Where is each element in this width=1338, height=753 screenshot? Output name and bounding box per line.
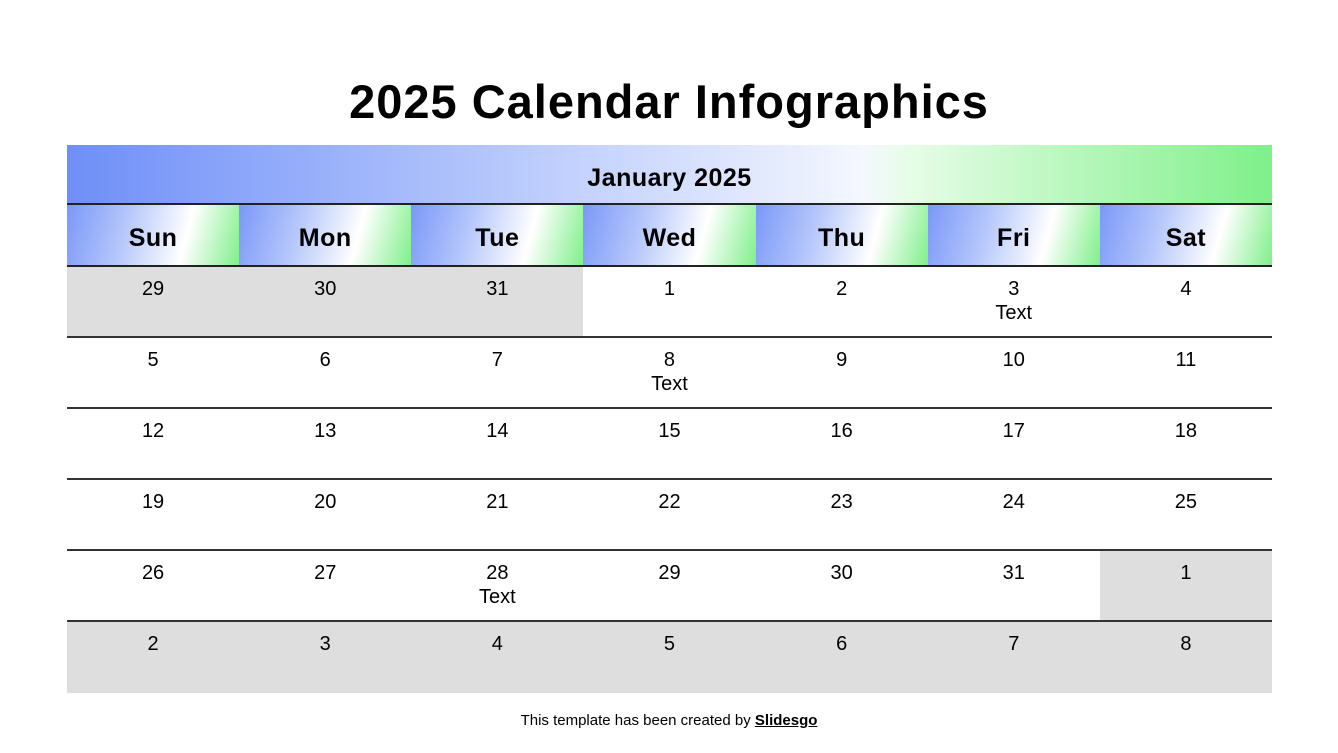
- calendar grid: 6: [836, 633, 847, 655]
- calendar grid: 27: [314, 562, 336, 584]
- calendar grid: 4: [492, 633, 503, 655]
- calendar grid: 1: [664, 278, 675, 300]
- calendar grid: 6: [320, 349, 331, 371]
- calendar grid: 1: [1180, 562, 1191, 584]
- calendar grid: 12: [142, 420, 164, 442]
- calendar grid: 9: [836, 349, 847, 371]
- calendar grid: Text: [651, 373, 688, 395]
- calendar grid: 18: [1175, 420, 1197, 442]
- calendar grid: 29: [658, 562, 681, 584]
- weekday headers: Tue: [475, 224, 519, 252]
- calendar grid: 3: [320, 633, 331, 655]
- calendar grid: 30: [314, 278, 336, 300]
- weekday headers: Wed: [643, 224, 696, 252]
- weekday headers: Sat: [1166, 224, 1206, 252]
- calendar grid: 7: [492, 349, 503, 371]
- calendar grid: 5: [664, 633, 675, 655]
- calendar grid: 21: [486, 491, 508, 513]
- weekday headers: Sun: [129, 224, 177, 252]
- calendar grid: 17: [1003, 420, 1025, 442]
- calendar grid: 8: [664, 349, 675, 371]
- calendar grid: 31: [486, 278, 508, 300]
- calendar grid: 19: [142, 491, 164, 513]
- calendar grid: 4: [1180, 278, 1191, 300]
- calendar grid: [67, 267, 1272, 693]
- calendar grid: 13: [314, 420, 336, 442]
- calendar grid: 24: [1003, 491, 1025, 513]
- calendar grid: 11: [1176, 349, 1196, 371]
- calendar grid: 8: [1180, 633, 1191, 655]
- title: 2025 Calendar Infographics: [349, 75, 989, 128]
- calendar grid: 20: [314, 491, 336, 513]
- calendar grid: 15: [658, 420, 681, 442]
- weekday headers: Fri: [997, 224, 1030, 252]
- calendar grid: 16: [830, 420, 853, 442]
- calendar grid: 25: [1175, 491, 1197, 513]
- calendar grid: 28: [486, 562, 508, 584]
- calendar grid: 10: [1003, 349, 1025, 371]
- calendar grid: 5: [148, 349, 159, 371]
- calendar grid: 29: [142, 278, 164, 300]
- calendar grid: 26: [142, 562, 164, 584]
- calendar grid: 2: [148, 633, 159, 655]
- weekday headers: Thu: [818, 224, 865, 252]
- footer: This template has been created by Slidesgo: [521, 712, 817, 729]
- calendar grid: Text: [479, 586, 516, 608]
- weekday headers: Mon: [299, 224, 352, 252]
- calendar grid: Text: [995, 302, 1032, 324]
- calendar grid: 2: [836, 278, 847, 300]
- weekday headers: [67, 205, 1272, 267]
- calendar grid: 30: [830, 562, 853, 584]
- calendar grid: 22: [658, 491, 681, 513]
- calendar grid: 31: [1003, 562, 1025, 584]
- month header: [67, 145, 1272, 205]
- calendar grid: 3: [1008, 278, 1019, 300]
- calendar grid: 14: [486, 420, 508, 442]
- month header: January 2025: [587, 164, 752, 192]
- calendar grid: 7: [1008, 633, 1019, 655]
- calendar grid: 23: [830, 491, 853, 513]
